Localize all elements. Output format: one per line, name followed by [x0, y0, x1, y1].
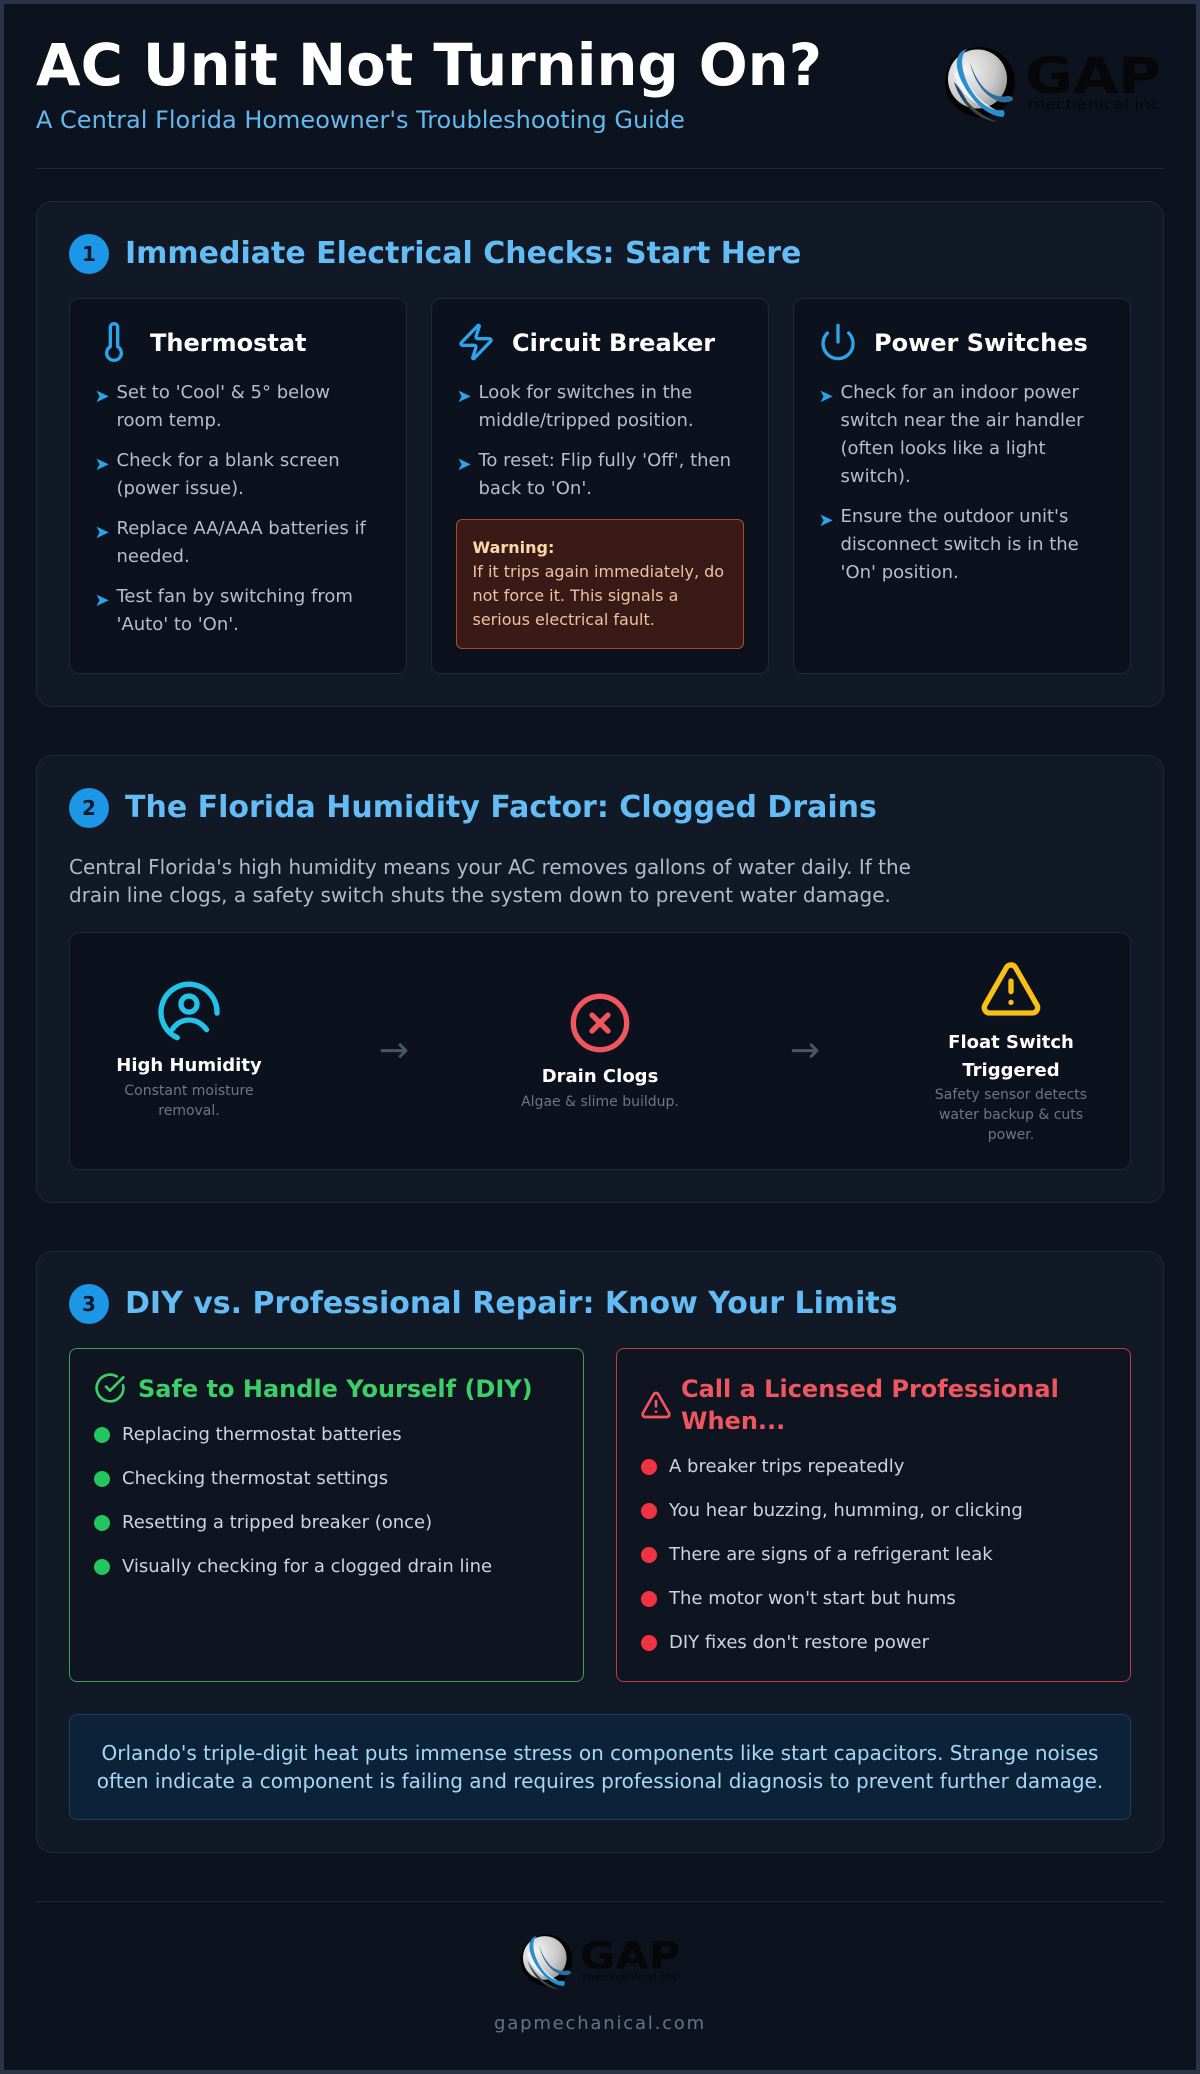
card: power switches: Ensure the outdoor unit's: [840, 506, 1068, 527]
card: thermostat: ➤: [94, 590, 110, 611]
item: [641, 1544, 993, 1565]
card: thermostat: room temp.: [116, 410, 222, 431]
card heading: When...: [681, 1407, 785, 1435]
callout: Orlando heat: [69, 1714, 1131, 1820]
logo: GAP Mechanical: mechanical inc: [1028, 98, 1160, 113]
item: [94, 518, 366, 567]
card: thermostat: ➤: [94, 522, 110, 543]
badge 1: 1: [82, 242, 96, 266]
logo: GAP Mechanical: [945, 47, 1161, 122]
card: power switches: Check for an indoor power: [840, 382, 1079, 403]
heading: Immediate Electrical Checks: Start Here: [125, 236, 801, 271]
label: Drain Clogs: [542, 1066, 658, 1087]
logo: GAP Mechanical: GAP: [1025, 47, 1161, 105]
description: Algae & slime buildup.: [521, 1094, 679, 1110]
item: [456, 450, 731, 499]
card: power switches: disconnect switch is in the: [840, 534, 1079, 555]
label: [948, 1032, 1074, 1080]
card: DIY: Visually checking for a clogged drain line: [122, 1556, 492, 1577]
description: water backup & cuts: [939, 1107, 1083, 1123]
card heading: [681, 1375, 1059, 1435]
card: thermostat: Test fan by switching from: [116, 586, 353, 607]
icon: circle x: [570, 994, 630, 1052]
step: drain clogs: [521, 994, 679, 1110]
card: power switches: (often looks like a light: [840, 438, 1046, 459]
card: thermostat: ➤: [94, 386, 110, 407]
card: DIY: Resetting a tripped breaker (once): [122, 1512, 432, 1533]
header: [36, 32, 822, 134]
item: [641, 1500, 1023, 1521]
callout: Orlando heat: Orlando's triple-digit heat puts immense stress on components like start capacitors. Strange noises: [102, 1741, 1098, 1765]
title: AC Unit Not Turning On?: [36, 32, 822, 99]
heading: The Florida Humidity Factor: Clogged Drains: [125, 790, 877, 825]
label: High Humidity: [116, 1055, 262, 1076]
footer logo: [520, 1934, 681, 1990]
card: circuit breaker: back to 'On'.: [478, 478, 592, 499]
card: thermostat: Set to 'Cool' & 5° below: [116, 382, 330, 403]
intro paragraph: Central Florida's high humidity means your AC removes gallons of water daily. If the: [69, 854, 911, 878]
item: [456, 382, 694, 431]
card: circuit breaker: Look for switches in the: [478, 382, 692, 403]
description: power.: [988, 1127, 1034, 1143]
panel: section 3 DIY vs pro: [36, 1251, 1164, 1853]
card: thermostat: ➤: [94, 454, 110, 475]
card: DIY: Replacing thermostat batteries: [122, 1424, 402, 1445]
card: power switches: switch).: [840, 466, 911, 487]
card: professional: There are signs of a refrigerant leak: [669, 1544, 993, 1565]
item: [94, 1512, 432, 1533]
icon: warning triangle: [982, 962, 1040, 1016]
item: [94, 586, 353, 635]
icon: person: [158, 982, 220, 1040]
card: professional: The motor won't start but hums: [669, 1588, 956, 1609]
card: circuit breaker: [431, 298, 769, 674]
item: [641, 1588, 956, 1609]
description: Constant moisture: [124, 1083, 254, 1099]
callout: warning: serious electrical fault.: [472, 610, 655, 629]
subtitle: A Central Florida Homeowner's Troubleshooting Guide: [36, 106, 685, 134]
footer logo: GAP: [580, 1934, 681, 1977]
icon: warning: [641, 1392, 671, 1418]
card: power switches: switch near the air handler: [840, 410, 1083, 431]
callout: warning: If it trips again immediately, do: [472, 562, 724, 581]
card: thermostat: (power issue).: [116, 478, 244, 499]
panel: section 1 electrical checks: [36, 201, 1164, 707]
icon: zap: [459, 324, 493, 360]
description: Safety sensor detects: [935, 1087, 1087, 1103]
description: [124, 1083, 254, 1119]
item: [94, 382, 330, 431]
card: DIY: Checking thermostat settings: [122, 1468, 388, 1489]
arrow: →: [790, 1030, 820, 1071]
badge 3: 3: [82, 1292, 96, 1316]
label: Triggered: [962, 1060, 1060, 1080]
card: professional: You hear buzzing, humming, or clicking: [669, 1500, 1023, 1521]
callout: warning: Warning:: [472, 538, 554, 557]
icon: check: [95, 1373, 125, 1403]
card: professional: DIY fixes don't restore power: [669, 1632, 929, 1653]
card heading: Safe to Handle Yourself (DIY): [138, 1375, 533, 1403]
card: circuit breaker: To reset: Flip fully 'Off', then: [478, 450, 731, 471]
item: [641, 1456, 904, 1477]
card: thermostat: Replace AA/AAA batteries if: [116, 518, 366, 539]
item: [94, 1556, 492, 1577]
card: thermostat: [69, 298, 407, 674]
step: float switch: [935, 962, 1087, 1143]
card heading: Circuit Breaker: [512, 329, 715, 357]
card heading: Power Switches: [874, 329, 1088, 357]
item: [94, 450, 340, 499]
item: [818, 506, 1079, 583]
label: Float Switch: [948, 1032, 1074, 1052]
card: thermostat: Check for a blank screen: [116, 450, 340, 471]
item: [818, 382, 1084, 487]
item: [641, 1632, 929, 1653]
card: circuit breaker: ➤: [456, 386, 472, 407]
description: [935, 1087, 1087, 1143]
item: [94, 1468, 388, 1489]
panel: section 2 humidity: [36, 755, 1164, 1203]
card: power switches: ➤: [818, 386, 834, 407]
card: professional: A breaker trips repeatedly: [669, 1456, 904, 1477]
callout: warning: [456, 519, 744, 649]
intro paragraph: [69, 854, 911, 906]
heading: DIY vs. Professional Repair: Know Your Limits: [125, 1286, 898, 1321]
card: power switches: 'On' position.: [840, 562, 959, 583]
badge 2: 2: [82, 796, 96, 820]
flow diagram: [69, 932, 1131, 1170]
card: power switches: ➤: [818, 510, 834, 531]
item: [94, 1424, 402, 1445]
callout: warning: not force it. This signals a: [472, 586, 678, 605]
badge 2: [69, 788, 109, 828]
card: circuit breaker: ➤: [456, 454, 472, 475]
description: removal.: [158, 1103, 220, 1119]
callout: Orlando heat: often indicate a component is failing and requires professional diagnosis to prevent further damage.: [97, 1769, 1103, 1793]
card: circuit breaker: middle/tripped position.: [478, 410, 694, 431]
intro paragraph: drain line clogs, a safety switch shuts the system down to prevent water damage.: [69, 882, 891, 906]
card: DIY: [69, 1348, 584, 1682]
card heading: Call a Licensed Professional: [681, 1375, 1059, 1403]
card heading: Thermostat: [150, 329, 306, 357]
card: power switches: [793, 298, 1131, 674]
card: thermostat: needed.: [116, 546, 190, 567]
arrow: →: [379, 1030, 409, 1071]
footer website: gapmechanical.com: [494, 2013, 706, 2034]
card: thermostat: 'Auto' to 'On'.: [116, 614, 239, 635]
badge 1: [69, 234, 109, 274]
footer logo: mechanical inc: [582, 1972, 680, 1983]
card: professional: [616, 1348, 1131, 1682]
icon: thermometer: [104, 322, 123, 362]
icon: power: [821, 324, 855, 360]
step: high humidity: [116, 982, 262, 1119]
badge 3: [69, 1284, 109, 1324]
